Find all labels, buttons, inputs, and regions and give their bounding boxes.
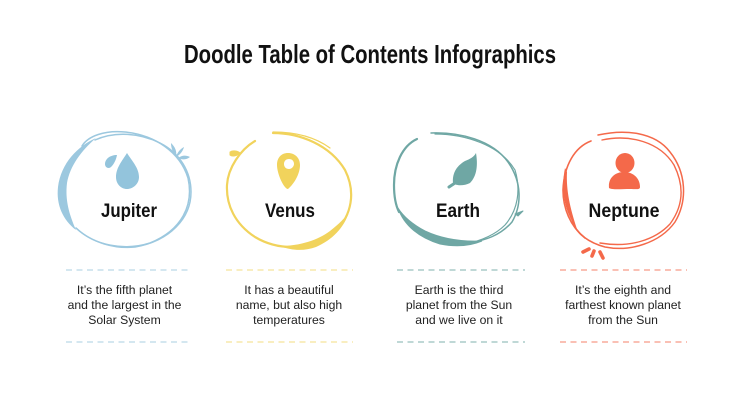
- heading: Jupiter: Jupiter: [101, 201, 158, 222]
- panel: Venus: [226, 132, 353, 342]
- description: Venus: name, but also high: [236, 298, 342, 312]
- description: Neptune: farthest known planet: [565, 298, 682, 312]
- doodle circle: Neptune: [563, 132, 684, 258]
- dashed line bottom: [226, 341, 353, 343]
- icon: person: [609, 153, 640, 189]
- sprout marks: [583, 249, 603, 258]
- sprig: [515, 211, 523, 216]
- description: Venus: temperatures: [253, 313, 325, 327]
- description: Venus: It has a beautiful: [244, 283, 334, 297]
- icon: location pin: [277, 153, 300, 189]
- description: Neptune: It’s the eighth and: [575, 283, 671, 297]
- title: Doodle Table of Contents Infographics: [184, 39, 556, 69]
- description: Jupiter: and the largest in the: [68, 298, 182, 312]
- description: Jupiter: It’s the fifth planet: [77, 283, 173, 297]
- doodle circle: Venus: [227, 132, 351, 250]
- dashed line top: [226, 269, 353, 271]
- icon: water drop: [105, 153, 139, 189]
- dashed line bottom: [560, 341, 687, 343]
- panel: Earth: [394, 133, 525, 342]
- description: Earth: planet from the Sun: [406, 298, 512, 312]
- panel: Jupiter: [58, 132, 192, 342]
- panel: Neptune: [560, 132, 687, 342]
- heading: Neptune: Neptune: [588, 201, 660, 222]
- description: Earth: Earth is the third: [415, 283, 503, 297]
- sprout marks: [171, 143, 190, 159]
- bud: [230, 151, 240, 156]
- dashed line top: [66, 269, 192, 271]
- dashed line top: [560, 269, 687, 271]
- icon: leaf: [449, 153, 477, 187]
- doodle circle: Jupiter: [58, 132, 191, 247]
- doodle circle: Earth: [394, 133, 523, 246]
- dashed line top: [397, 269, 525, 271]
- heading: Venus: Venus: [265, 201, 315, 222]
- description: Neptune: from the Sun: [588, 313, 658, 327]
- dashed line bottom: [397, 341, 525, 343]
- description: Earth: and we live on it: [415, 313, 503, 327]
- description: Jupiter: Solar System: [88, 313, 161, 327]
- heading: Earth: Earth: [436, 201, 480, 222]
- dashed line bottom: [66, 341, 192, 343]
